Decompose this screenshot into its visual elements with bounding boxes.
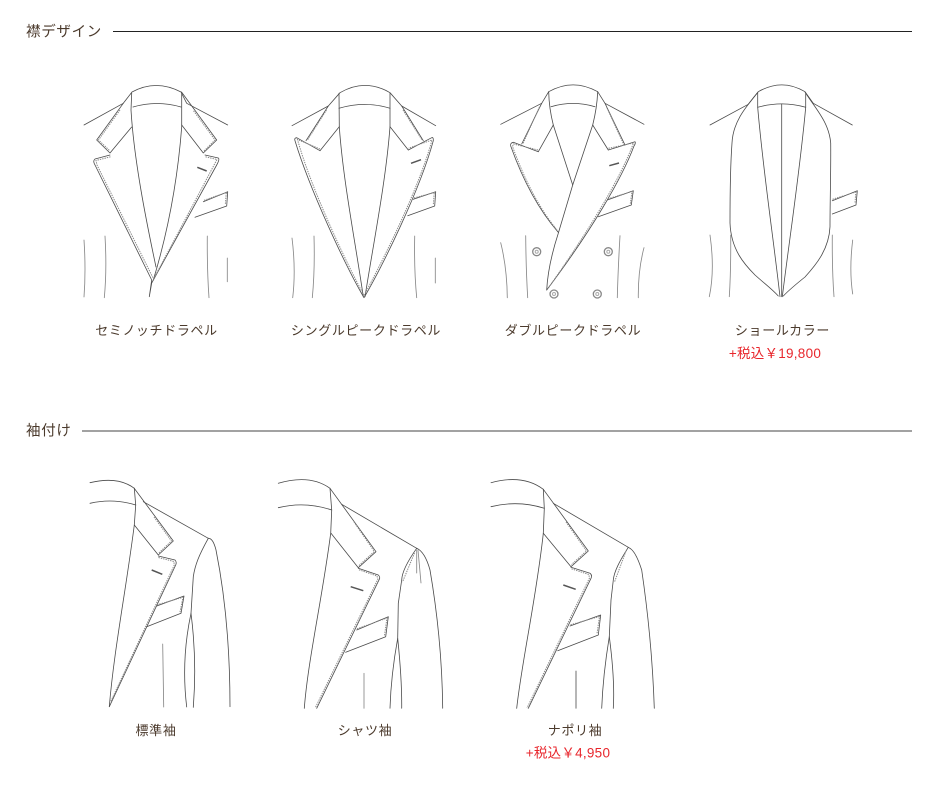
heading: sleeve attachment: 袖付け <box>26 422 72 440</box>
label: shawl collar: ショールカラー <box>735 323 830 338</box>
label: semi-notch lapel: セミノッチドラペル <box>95 323 218 338</box>
label: single peak lapel: シングルピークドラペル <box>291 323 441 338</box>
label: standard sleeve: 標準袖 <box>136 723 176 738</box>
label: double peak lapel: ダブルピークドラペル <box>505 323 641 338</box>
illustration: semi-notch lapel <box>84 86 228 298</box>
illustration: shirt sleeve <box>278 480 443 708</box>
label: Naples sleeve: ナポリ袖 <box>548 723 602 738</box>
label: shirt sleeve: シャツ袖 <box>338 723 392 738</box>
illustration: standard sleeve <box>90 480 230 707</box>
heading: collar design: 襟デザイン <box>26 22 102 40</box>
price: shawl collar surcharge: +税込￥19,800 <box>729 346 821 361</box>
price: Naples sleeve surcharge: +税込￥4,950 <box>526 746 610 760</box>
illustration: double peak lapel <box>501 85 644 298</box>
illustration: Naples sleeve <box>491 480 654 708</box>
illustration: single peak lapel <box>292 85 436 298</box>
illustration: shawl collar <box>709 85 857 297</box>
